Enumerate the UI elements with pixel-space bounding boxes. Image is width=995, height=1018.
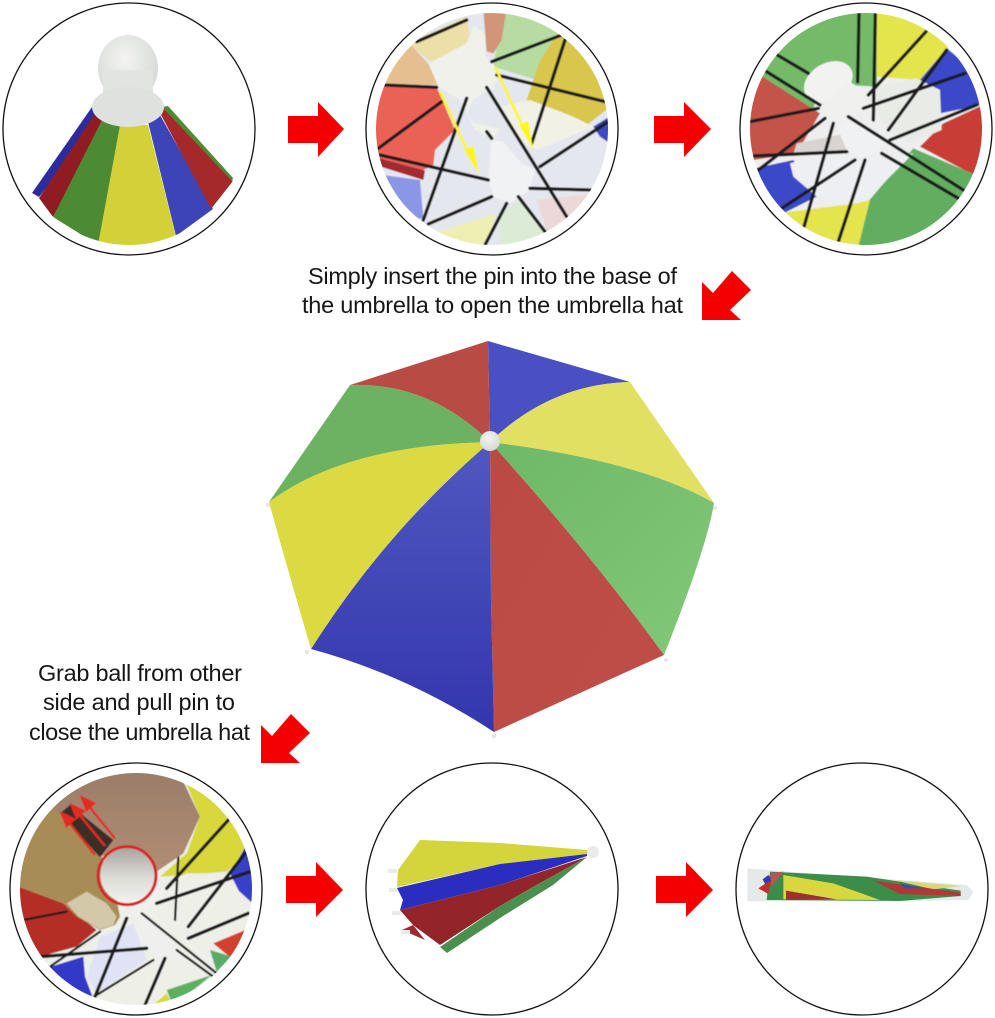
caption: open the umbrella: Simply insert the pin into the base of bbox=[308, 263, 677, 289]
fingers bbox=[10, 767, 200, 930]
fabric fan bbox=[32, 106, 233, 245]
rolled canopy bbox=[758, 872, 962, 901]
caption: close the umbrella: side and pull pin to bbox=[43, 689, 235, 715]
white pin and base bbox=[428, 25, 535, 203]
arrow: down to closing step bbox=[261, 714, 310, 763]
black ribs bbox=[23, 820, 250, 1005]
arrow: down to open umbrella bbox=[702, 271, 751, 320]
rib tips and ball bbox=[388, 846, 599, 934]
plastic sleeve bbox=[747, 868, 973, 901]
black ribs bbox=[750, 13, 977, 242]
arrow: step 5 to step 6 bbox=[656, 862, 713, 917]
open rainbow umbrella bbox=[266, 341, 717, 738]
panel: half-closed umbrella bbox=[366, 763, 618, 1015]
panel: right green bbox=[490, 442, 714, 655]
arrow: step 1 to step 2 bbox=[288, 102, 344, 157]
panel: upper left green bbox=[269, 385, 490, 502]
hub ball bbox=[480, 431, 500, 451]
panel: left yellow bbox=[269, 442, 490, 649]
panel: pin fully inserted bbox=[740, 3, 992, 255]
caption: open the umbrella bbox=[302, 263, 683, 318]
arrow: step 4 to step 5 bbox=[286, 862, 343, 917]
white ball held bbox=[100, 847, 156, 903]
panel: bottom right red bbox=[490, 442, 664, 732]
red highlight circle bbox=[98, 847, 156, 905]
fabric sections bbox=[750, 13, 982, 245]
red pull arrows bbox=[62, 797, 115, 855]
panel: closed pin on top of umbrella bbox=[3, 3, 255, 255]
fabric sections bbox=[20, 784, 252, 1004]
panel: bottom left blue bbox=[311, 442, 494, 732]
pin ball and collar bbox=[92, 35, 164, 127]
closed canopy folds bbox=[397, 840, 587, 953]
yellow arrows bbox=[440, 67, 533, 175]
caption: open the umbrella: the umbrella to open the umbrella hat bbox=[302, 292, 683, 318]
rib tips bbox=[266, 503, 717, 738]
panel: pin being inserted bbox=[366, 3, 623, 255]
panel: fingers pulling the pin bbox=[10, 763, 263, 1015]
white pin bbox=[803, 60, 856, 152]
caption: close the umbrella: Grab ball from other bbox=[38, 660, 242, 686]
white pin and base bbox=[117, 887, 185, 960]
caption: close the umbrella bbox=[29, 660, 250, 745]
panel: top blue bbox=[488, 341, 630, 442]
panel: umbrella packed in sleeve bbox=[736, 763, 988, 1015]
arrow: step 2 to step 3 bbox=[654, 102, 711, 157]
panel: upper right yellow bbox=[490, 382, 714, 503]
caption: close the umbrella: close the umbrella hat bbox=[29, 719, 250, 745]
black ribs bbox=[378, 20, 608, 245]
fabric sections bbox=[376, 13, 608, 245]
panel: top left red bbox=[350, 341, 490, 442]
paper doilies bbox=[790, 78, 942, 203]
